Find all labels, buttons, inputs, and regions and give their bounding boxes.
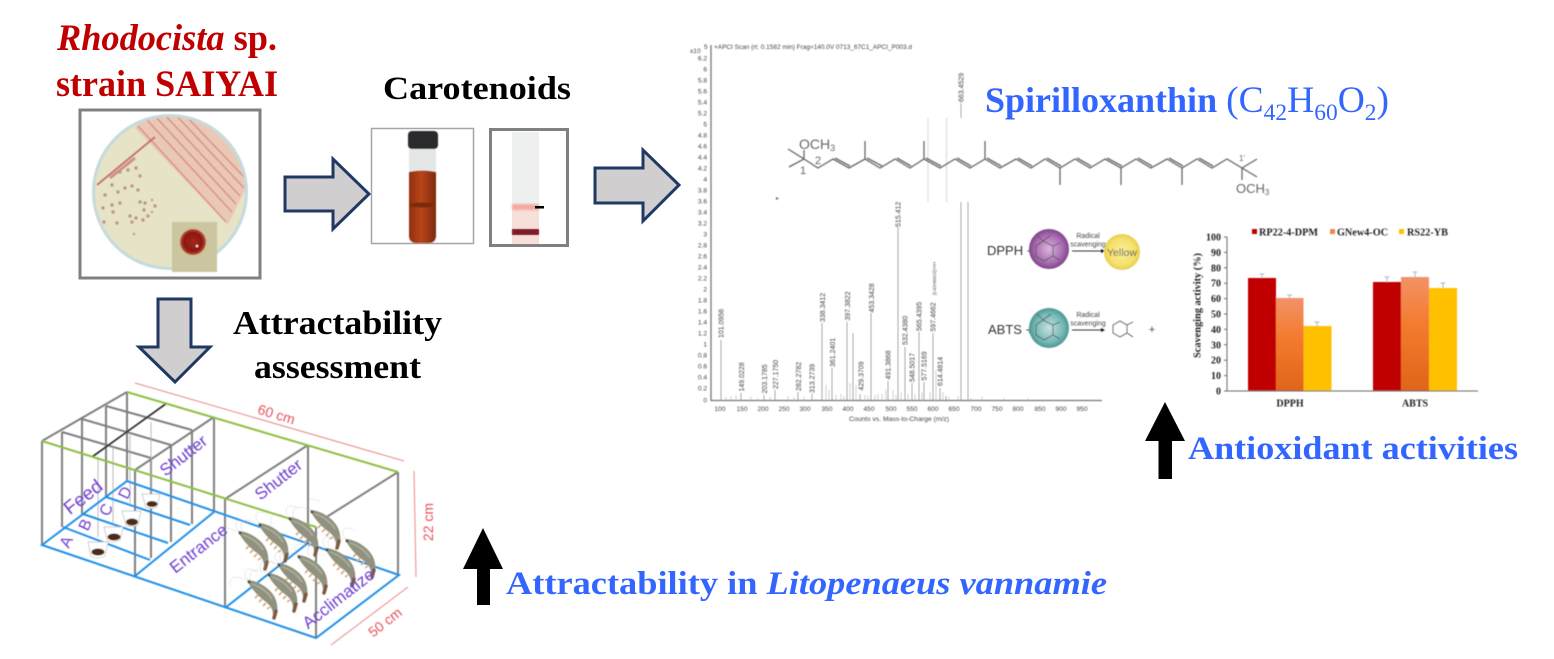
- peak labels: 515.412: [896, 202, 902, 227]
- diagram: DPPH reaction: [987, 229, 1140, 270]
- x axis tick labels: Counts vs. Mass-to-Charge (m/z): [849, 416, 949, 423]
- heading: Spirilloxanthin formula: H: [1287, 80, 1314, 121]
- peak labels: [C42H60O2]+H+: [932, 261, 937, 295]
- y axis tick labels: 2: [703, 286, 707, 294]
- heading: Attractability assessment: Attractability: [233, 305, 442, 342]
- chart: mass spectrum: 5: [704, 44, 708, 51]
- x axis tick labels: 900: [1055, 406, 1067, 413]
- arrow: carotenoids to spectrum: [595, 150, 679, 221]
- bar chart: scavenging activity: 100: [1206, 232, 1221, 244]
- x axis tick labels: 200: [757, 406, 769, 413]
- peak labels: 149.0228: [739, 362, 746, 392]
- peak labels: 361.2401: [830, 338, 837, 367]
- chart legend: RS22-YB: [1407, 228, 1448, 238]
- y axis tick labels: 5.6: [698, 88, 707, 96]
- red dimensions: 22 cm: [420, 503, 436, 541]
- x axis tick labels: 450: [863, 406, 875, 413]
- diagram: ABTS reaction: ABTS +: [988, 322, 1033, 337]
- y axis tick labels: 4: [703, 176, 707, 184]
- y axis tick labels: 2.4: [698, 264, 707, 272]
- chamber frame: [42, 392, 398, 638]
- y axis tick labels: 3.8: [698, 188, 707, 194]
- purple chamber labels: C: [97, 501, 117, 519]
- chemical structure: spirilloxanthin: OCH: [1236, 181, 1265, 196]
- chemical structure: spirilloxanthin: 1: [800, 165, 806, 177]
- y axis tick labels: 2.8: [698, 242, 707, 250]
- heading: Attractability in Litopenaeus vannamie: Attractability in Litopenaeus vannamie: [506, 566, 1107, 602]
- error bars: [1260, 272, 1446, 326]
- y axis tick labels: 5.2: [698, 110, 707, 118]
- diagram: DPPH reaction: DPPH +: [987, 243, 1034, 258]
- x axis tick labels: 150: [736, 406, 748, 413]
- x axis tick labels: 950: [1076, 406, 1088, 413]
- x axis tick labels: 300: [799, 406, 811, 413]
- peak labels: 491.3868: [886, 350, 892, 380]
- diagram: ABTS reaction: +: [1149, 324, 1155, 336]
- peak labels: 101.0956: [718, 309, 726, 338]
- red dimensions: [135, 383, 436, 645]
- y axis tick labels: 6.2: [698, 56, 707, 62]
- peak labels: 614.4814: [938, 357, 944, 386]
- purple chamber labels: Shutter: [251, 455, 306, 504]
- purple chamber labels: Shutter: [156, 431, 211, 480]
- bar chart: scavenging activity: 80: [1211, 264, 1221, 274]
- chemical structure: spirilloxanthin: OCH: [799, 136, 830, 152]
- y axis tick labels: 3.4: [698, 210, 707, 216]
- purple chamber labels: Acclimatize: [299, 565, 378, 633]
- chemical structure: spirilloxanthin: 3: [1265, 188, 1270, 197]
- diagram: DPPH reaction: Yellow: [1107, 247, 1137, 259]
- bar chart: scavenging activity: 20: [1211, 356, 1221, 366]
- x axis tick labels: 600: [927, 406, 939, 413]
- chemical structure: spirilloxanthin: [788, 136, 1270, 197]
- y axis tick labels: 1.2: [698, 330, 707, 338]
- chemical structure: spirilloxanthin: 1': [1239, 154, 1245, 163]
- chart legend: [1252, 228, 1448, 238]
- x axis tick labels: 650: [948, 406, 960, 413]
- purple chamber labels: B: [76, 517, 96, 534]
- cups of feed: [88, 494, 160, 558]
- y axis tick labels: 5.8: [698, 78, 707, 84]
- title: Rhodocista strain: Rhodocista sp.: [56, 18, 277, 59]
- y axis tick labels: 1: [703, 342, 707, 348]
- x axis tick labels: 400: [842, 406, 854, 413]
- panel: TLC strip photo: [490, 130, 568, 246]
- y axis tick labels: 5.4: [698, 100, 707, 106]
- diagram: ABTS reaction: scavenging: [1070, 320, 1106, 328]
- bar chart: scavenging activity: DPPH: [1276, 398, 1304, 410]
- heading: Spirilloxanthin formula: 60: [1314, 100, 1338, 126]
- peak labels: 565.4395: [916, 302, 924, 331]
- y axis tick labels: 0.4: [698, 374, 707, 382]
- peak labels: 429.3709: [858, 361, 866, 390]
- bar chart: scavenging activity: 70: [1211, 278, 1221, 290]
- bar chart: scavenging activity: 10: [1211, 371, 1221, 382]
- heading: Attractability assessment: [233, 305, 442, 386]
- peak labels: 663.4529: [958, 73, 966, 102]
- x axis tick labels: 100: [714, 406, 726, 413]
- peak labels: [718, 73, 966, 394]
- heading: Antioxidant activities: Antioxidant activities: [1188, 431, 1518, 467]
- arrow: up to antioxidant chart: [1145, 402, 1185, 479]
- y axis tick labels: 1.6: [698, 308, 707, 316]
- heading: Spirilloxanthin formula: Spirilloxanthin (C: [985, 80, 1264, 121]
- y axis tick labels: 3: [703, 232, 707, 238]
- heading: Spirilloxanthin formula: O: [1338, 80, 1365, 121]
- bar chart: scavenging activity: 30: [1211, 340, 1221, 352]
- peak labels: 577.5169: [922, 351, 928, 380]
- y axis tick labels: 3.2: [698, 220, 707, 228]
- x axis tick labels: 700: [970, 406, 982, 413]
- bar chart: scavenging activity: ABTS: [1402, 398, 1428, 410]
- y axis tick labels: 0.8: [698, 352, 707, 360]
- heading: Spirilloxanthin formula: 42: [1264, 100, 1287, 126]
- panel: carotenoid vial photo: [372, 128, 474, 244]
- diagram: shrimp choice apparatus: [42, 383, 436, 645]
- x axis tick labels: 500: [885, 406, 897, 413]
- y axis tick labels: 2.2: [698, 276, 707, 282]
- purple chamber labels: Entrance: [166, 520, 231, 577]
- y axis tick labels: 0: [703, 398, 707, 404]
- arrow: down to assessment: [139, 299, 210, 382]
- bar chart: scavenging activity: 40: [1211, 325, 1221, 336]
- spectrum peaks: [721, 103, 968, 400]
- y axis tick labels: 4.4: [698, 154, 707, 162]
- peak labels: 597.4662: [930, 302, 938, 332]
- x axis tick labels: 550: [906, 406, 918, 413]
- peak labels: 313.2739: [810, 364, 816, 393]
- bar chart: scavenging activity: 50: [1211, 310, 1221, 320]
- peak labels: 453.3428: [869, 283, 876, 312]
- peak labels: 397.3822: [845, 291, 852, 320]
- peak labels: 282.2782: [796, 362, 803, 391]
- shrimps: [221, 499, 375, 618]
- x axis tick labels: 750: [991, 406, 1003, 413]
- y axis tick labels: 4.2: [698, 166, 707, 172]
- purple chamber labels: A: [57, 533, 77, 551]
- bar chart: scavenging activity: 0: [1216, 386, 1221, 398]
- chart: mass spectrum: x10: [690, 48, 701, 55]
- y axis tick labels: 5: [703, 122, 707, 128]
- y axis tick labels: 4.6: [698, 144, 707, 150]
- chemical structure: spirilloxanthin: 2: [815, 155, 821, 167]
- arrow: plate to carotenoids: [285, 159, 369, 229]
- heading: Carotenoids: Carotenoids: [383, 71, 571, 107]
- x axis tick labels: 850: [1034, 406, 1046, 413]
- heading: Attractability assessment: assessment: [254, 349, 422, 386]
- y axis tick labels: 0.6: [698, 364, 707, 370]
- bar chart: scavenging activity: 90: [1211, 248, 1221, 259]
- chart legend: GNew4-OC: [1337, 228, 1388, 238]
- title: Rhodocista strain: strain SAIYAI: [56, 64, 278, 105]
- red dimensions: 60 cm: [256, 401, 297, 427]
- panel: petri dish photo: [80, 110, 260, 278]
- bar chart: scavenging activity: 60: [1211, 294, 1221, 305]
- peak labels: 227.1750: [773, 360, 780, 389]
- diagram: ABTS reaction: [988, 308, 1155, 348]
- peak labels: 203.1785: [762, 364, 769, 394]
- y axis tick labels: [698, 56, 707, 404]
- diagram: DPPH reaction: scavenging: [1070, 242, 1106, 248]
- bar chart: scavenging activity: Scavenging activity (%): [1192, 253, 1204, 358]
- chemical structure: spirilloxanthin: 3: [830, 143, 835, 153]
- diagram: ABTS reaction: Radical: [1076, 312, 1100, 319]
- y axis tick labels: 1.4: [698, 320, 707, 326]
- red dimensions: 50 cm: [365, 604, 405, 640]
- peak labels: 338.3412: [820, 293, 827, 322]
- purple chamber labels: Feed: [60, 476, 107, 519]
- peak labels: 532.4380: [902, 316, 910, 345]
- y axis tick labels: 1.8: [698, 298, 707, 304]
- peak labels: 548.5017: [910, 353, 916, 382]
- heading: Spirilloxanthin formula: ): [1377, 80, 1389, 121]
- bars: [1248, 277, 1457, 391]
- y axis tick labels: 2.6: [698, 254, 707, 260]
- chart: mass spectrum: [690, 44, 1102, 423]
- y axis tick labels: 3.6: [698, 198, 707, 206]
- title: Rhodocista strain: [56, 18, 278, 105]
- green top rails: [42, 392, 398, 527]
- x axis tick labels: [714, 406, 1088, 423]
- y axis tick labels: 4.8: [698, 132, 707, 140]
- chart legend: RP22-4-DPM: [1259, 228, 1319, 238]
- arrow: up to apparatus: [463, 528, 503, 605]
- bar chart: scavenging activity: [1192, 228, 1478, 410]
- x axis tick labels: 800: [1012, 406, 1024, 413]
- diagram: DPPH reaction: Radical: [1076, 233, 1100, 240]
- y axis tick labels: 6: [703, 66, 707, 74]
- x axis tick labels: 350: [821, 406, 833, 413]
- x axis tick labels: 250: [778, 406, 790, 413]
- purple chamber labels: D: [116, 484, 136, 502]
- icon: colony inset: [172, 222, 217, 272]
- purple chamber labels: [57, 431, 378, 633]
- blue floor: [42, 481, 399, 638]
- heading: Spirilloxanthin formula: 2: [1365, 100, 1377, 126]
- chart: mass spectrum: +APCI Scan (rt: 0.1582 min) Frag=140.0V 0713_67C1_APCI_P003.d: [714, 44, 912, 51]
- y axis tick labels: 0.2: [698, 386, 707, 392]
